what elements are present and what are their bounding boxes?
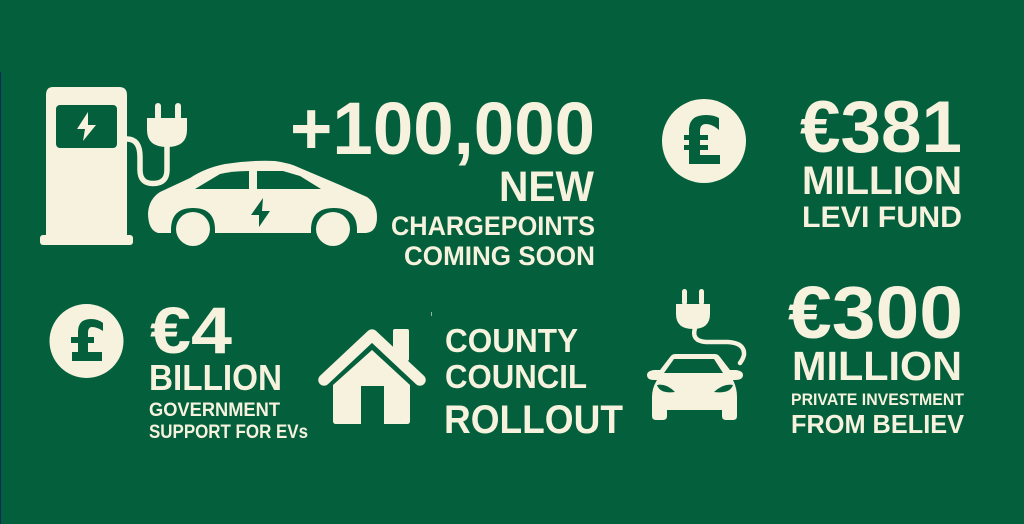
- text: €381 million Levi fund: [800, 87, 962, 234]
- text: county council rollout: COUNCIL: [445, 358, 587, 395]
- text: €300 million private investment: PRIVATE INVESTMENT: [791, 390, 965, 409]
- text: €4 billion government support: BILLION: [149, 357, 282, 398]
- icon: pound coin bottom: [50, 304, 124, 378]
- icon: plug and car front: [647, 289, 744, 420]
- text: €4 billion government support: SUPPORT FOR EVs: [149, 422, 308, 443]
- text: €300 million private investment: €300: [788, 271, 963, 354]
- heading: +100,000 new chargepoints: CHARGEPOINTS: [391, 211, 595, 241]
- text: county council rollout: COUNTY: [445, 322, 578, 359]
- icon: charging pump with plug: [40, 87, 187, 245]
- icon: electric car side view: [148, 161, 377, 246]
- text: €300 million private investment: FROM BELIEV: [791, 409, 965, 439]
- text: €300 million private investment: [788, 271, 965, 439]
- text: €381 million Levi fund: LEVI FUND: [802, 201, 962, 234]
- text: €300 million private investment: MILLION: [792, 343, 962, 389]
- text: county council rollout: ROLLOUT: [444, 398, 623, 442]
- text: €4 billion government support: GOVERNMENT: [149, 399, 280, 421]
- heading: +100,000 new chargepoints: +100,000: [290, 87, 595, 170]
- heading: +100,000 new chargepoints: [290, 87, 595, 271]
- text: county council rollout: [444, 322, 623, 442]
- text: €381 million Levi fund: MILLION: [802, 159, 962, 203]
- icon: currency coin top: [662, 99, 746, 183]
- text: €4 billion government support: [149, 293, 308, 443]
- heading: +100,000 new chargepoints: COMING SOON: [404, 241, 595, 271]
- icon: house: [324, 329, 420, 424]
- text: €381 million Levi fund: €381: [800, 87, 962, 168]
- heading: +100,000 new chargepoints: NEW: [499, 163, 594, 211]
- text: €4 billion government support: €4: [150, 293, 232, 367]
